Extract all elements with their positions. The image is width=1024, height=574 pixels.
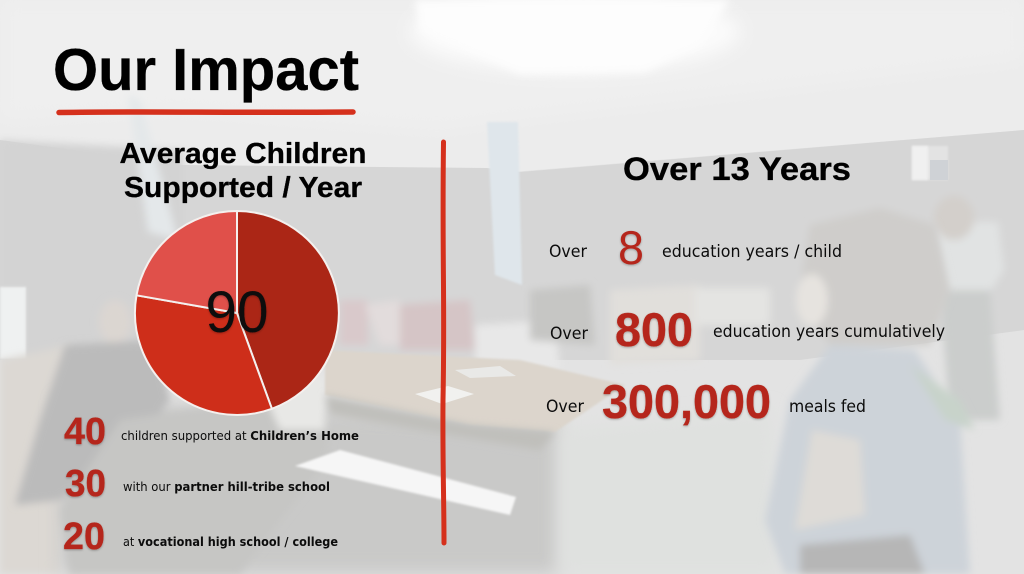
stat: 8 education years per child: Over — [549, 242, 587, 261]
left side furniture — [0, 287, 26, 359]
stat: 300,000 meals: meals fed — [789, 397, 866, 416]
divider line — [443, 142, 444, 543]
stat: 800 cumulative: Over — [550, 324, 588, 343]
stat: 30 partner school: 30 — [65, 463, 106, 505]
stat: 300,000 meals: 300,000 — [602, 375, 771, 428]
stat: 40 children's home — [64, 411, 359, 453]
stat: 30 partner school — [65, 463, 330, 505]
heading: over 13 years: Over 13 Years — [623, 151, 851, 187]
stat: 40 children's home: children supported at Children’s Home — [121, 428, 359, 443]
pie chart — [135, 211, 339, 415]
stat: 40 children's home: 40 — [64, 411, 106, 453]
stat: 8 education years per child: 8 — [618, 221, 644, 274]
slice: 40 — [237, 211, 339, 409]
heading: average children: Average Children — [120, 138, 366, 170]
stat: 800 cumulative — [550, 303, 945, 356]
stat: 20 vocational: 20 — [63, 516, 105, 558]
stat: 300,000 meals: Over — [546, 397, 584, 416]
stat: 30 partner school: with our partner hill-tribe school — [123, 479, 330, 494]
stat: 800 cumulative: 800 — [615, 303, 693, 356]
stat: 8 education years per child — [549, 221, 842, 274]
stat: 8 education years per child: education years / child — [662, 242, 842, 261]
stat: 20 vocational — [63, 516, 338, 558]
heading: average children: Supported / Year — [124, 172, 362, 204]
slice: 30 — [135, 295, 272, 415]
white bench — [295, 450, 516, 515]
table — [325, 350, 625, 432]
seated figures — [15, 196, 1004, 574]
floor shading — [60, 400, 560, 574]
standing figure — [765, 208, 975, 574]
stat: 20 vocational: at vocational high school / college — [123, 534, 338, 549]
stat: 800 cumulative: education years cumulatively — [713, 322, 945, 341]
stat: 300,000 meals — [546, 375, 866, 428]
heading: average children — [120, 138, 366, 204]
title: Our Impact — [53, 36, 359, 103]
title underline — [59, 109, 353, 115]
slice: 20 — [136, 211, 237, 313]
pie total: 90 — [206, 280, 268, 345]
